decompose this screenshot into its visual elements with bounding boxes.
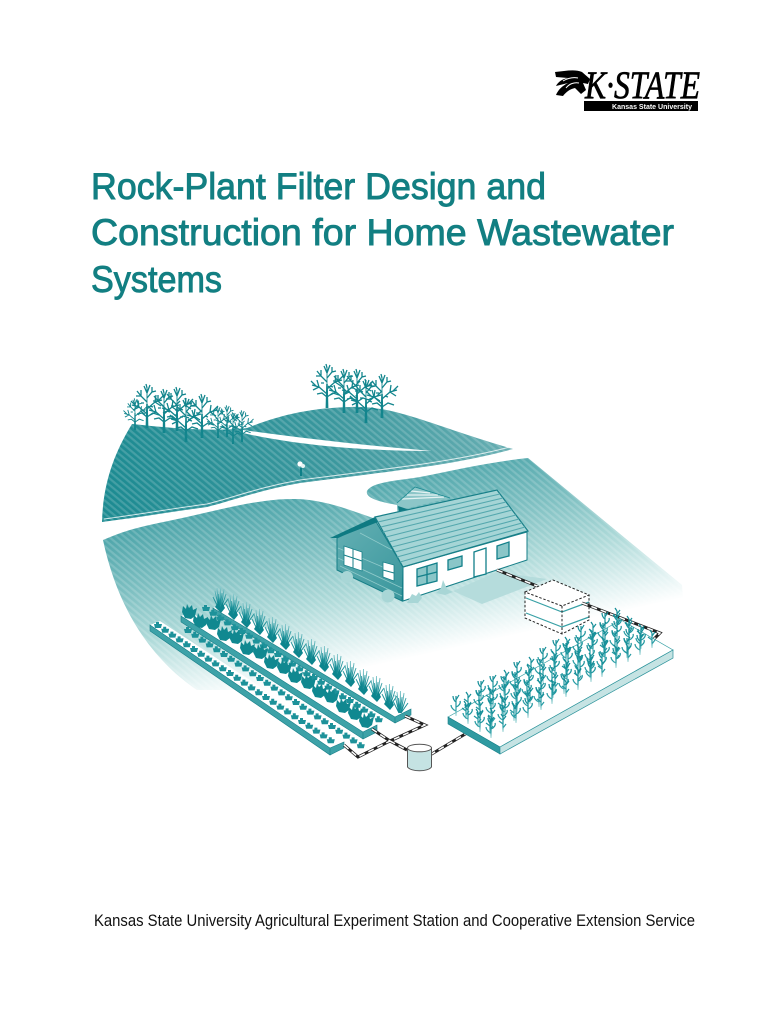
corn bed <box>448 608 673 754</box>
title: Construction for Home Wastewater <box>91 212 674 253</box>
back roof <box>397 487 450 512</box>
upper hill <box>102 407 513 522</box>
trees: hilltop grove <box>311 364 398 423</box>
gable wall <box>337 520 403 601</box>
icon: wildcat head <box>555 70 590 96</box>
gable eave <box>330 517 378 538</box>
roof <box>375 490 528 567</box>
title <box>91 166 674 300</box>
title: Rock-Plant Filter Design and <box>91 166 546 207</box>
title: Systems <box>91 259 222 300</box>
rock-plant cell: bed 1 small plants <box>150 621 365 755</box>
pipes: beds to collection tank <box>344 716 467 757</box>
footer credit: Kansas State University Agricultural Experiment Station and Cooperative Extension Service <box>94 912 695 930</box>
pipe: house to tank to corn bed <box>497 570 660 640</box>
gable windows <box>344 546 394 581</box>
patio <box>453 572 547 604</box>
shrubs <box>341 571 453 603</box>
front wall <box>403 532 527 601</box>
rock-plant cell: bed 2 bushes <box>181 604 383 739</box>
lower field <box>103 458 690 690</box>
collection tank <box>408 744 432 771</box>
K-State logo <box>555 64 700 111</box>
front windows and door <box>417 542 509 586</box>
icon: mailbox <box>297 461 305 476</box>
house <box>330 487 547 604</box>
white path wedge <box>243 430 432 451</box>
trees: left grove <box>123 384 254 444</box>
university name bar <box>584 101 698 111</box>
wordmark: K·STATE <box>584 64 700 107</box>
rock-plant cell: bed 3 grasses <box>213 587 411 723</box>
illustration: rock-plant filter homestead <box>102 364 690 771</box>
septic tank <box>525 580 589 634</box>
university name bar: Kansas State University <box>612 102 693 111</box>
